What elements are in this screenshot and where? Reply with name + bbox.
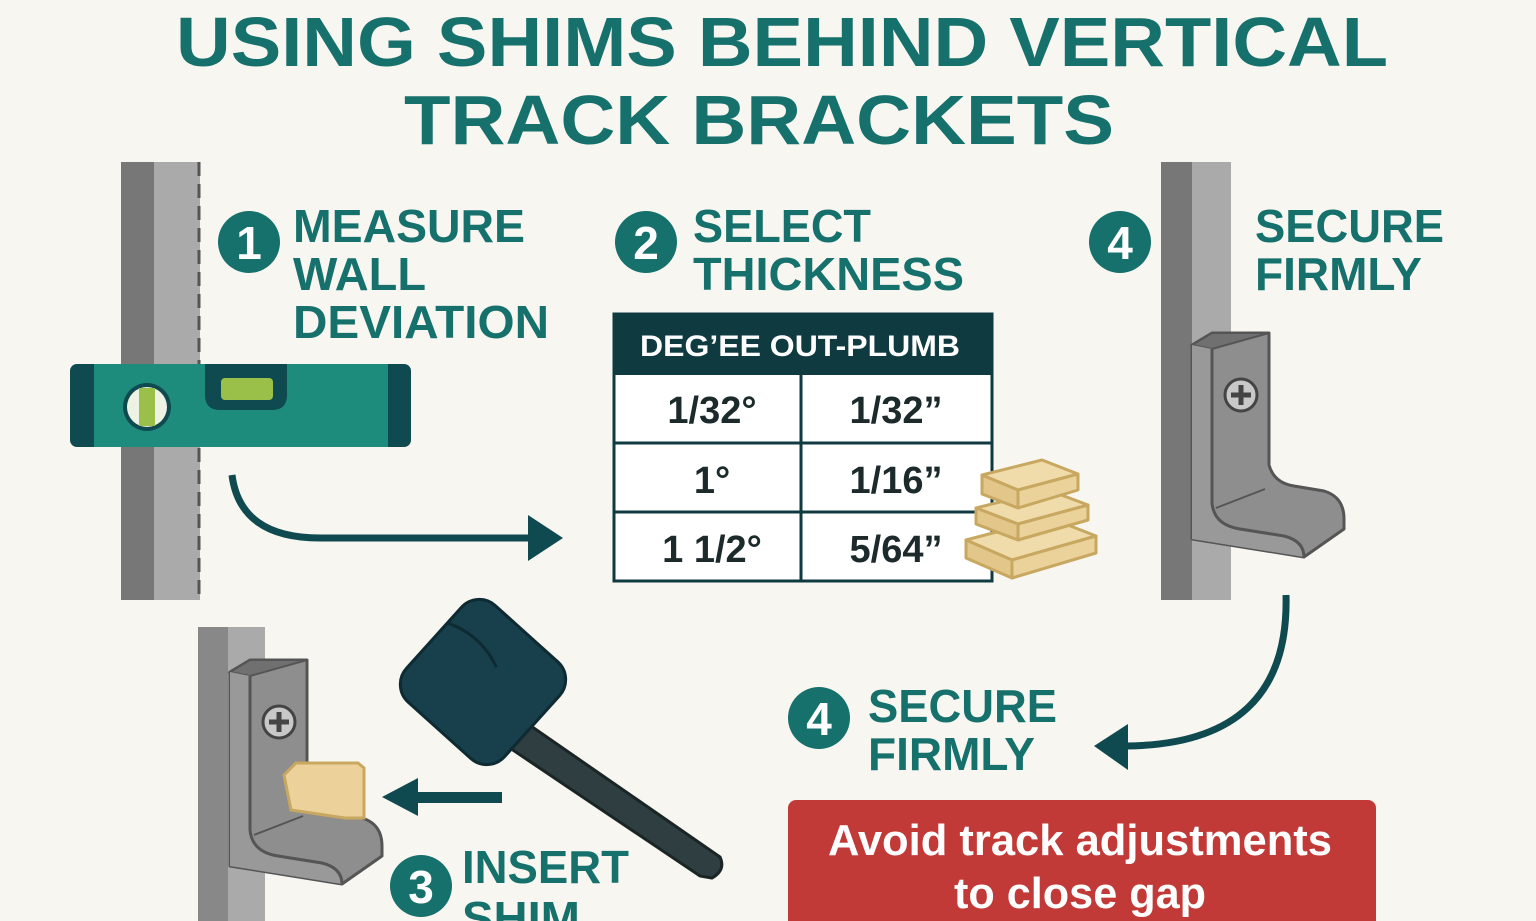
arrow: step 1 to 2 (232, 475, 563, 561)
step 3 heading: 3 (408, 861, 434, 913)
icon: shim being inserted (284, 763, 364, 818)
step 2 heading: THICKNESS (693, 248, 964, 300)
step 4 heading (bottom): SECURE (868, 680, 1057, 732)
title (176, 3, 1388, 159)
step 1 heading: DEVIATION (293, 296, 549, 348)
arrow: insert direction (382, 778, 502, 816)
step 4 heading (top) (1089, 200, 1444, 300)
title: TRACK BRACKETS (404, 81, 1114, 159)
callout: warning: to close gap (954, 869, 1206, 918)
table: thickness chart: 1 1/2° (662, 529, 762, 571)
step 4 heading (bottom): FIRMLY (868, 728, 1035, 780)
step 4 heading (bottom) (788, 680, 1057, 780)
left track rail (121, 162, 200, 600)
step 4 heading (bottom): 4 (806, 693, 832, 745)
step 2 heading (615, 200, 964, 300)
right track rail with bracket (1161, 162, 1344, 600)
step 1 heading: WALL (293, 248, 426, 300)
step 3 heading (390, 841, 629, 921)
table: thickness chart (614, 314, 992, 581)
table: thickness chart: 1/16” (850, 460, 942, 502)
callout: warning (788, 800, 1376, 921)
step 2 heading: SELECT (693, 200, 871, 252)
arrow: curved to step 4 (1094, 595, 1286, 770)
table: thickness chart: 1/32” (850, 390, 942, 432)
step 1 heading: 1 (236, 217, 262, 269)
icon: mallet (390, 590, 722, 878)
table: thickness chart: 1/32° (667, 390, 757, 432)
step 1 heading: MEASURE (293, 200, 525, 252)
step 2 heading: 2 (633, 217, 659, 269)
step 1 heading (218, 200, 549, 348)
table: thickness chart: 5/64” (850, 529, 942, 571)
title: USING SHIMS BEHIND VERTICAL (176, 3, 1388, 81)
step 3 heading: INSERT (462, 841, 629, 893)
bottom-left track rail with bracket (198, 627, 382, 921)
callout: warning: Avoid track adjustments (828, 816, 1332, 865)
table: thickness chart: 1° (694, 460, 730, 502)
step 4 heading (top): FIRMLY (1255, 248, 1422, 300)
icon: spirit level (70, 364, 411, 447)
step 4 heading (top): 4 (1107, 217, 1133, 269)
table: thickness chart: DEG’EE OUT-PLUMB (640, 330, 960, 363)
icon: shim stack (966, 460, 1096, 578)
step 4 heading (top): SECURE (1255, 200, 1444, 252)
